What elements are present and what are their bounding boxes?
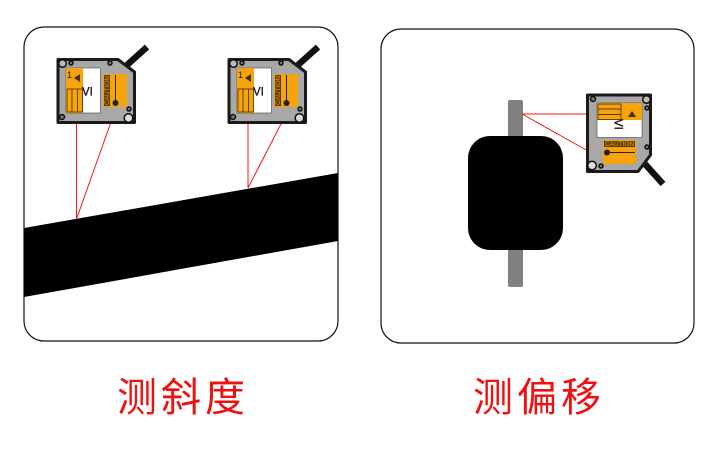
panel: tilt measurement [24,27,338,341]
panel frame right [381,29,694,343]
caption: tilt measurement: 测斜度 [117,376,249,420]
sensor 3: VI [612,119,624,130]
laser beams sensor 2 [248,122,282,188]
panel frame left [24,27,338,341]
sensor 3: CAUTION [605,141,634,148]
sensor 1: CAUTION [104,76,111,105]
sensor 1 [58,47,147,122]
sensor 2: VI [253,86,264,98]
inclined black band [24,173,338,297]
black block [468,136,563,250]
sensor 2 [229,47,318,122]
laser beams sensor 1 [76,122,111,219]
caption: offset measurement: 测偏移 [473,376,605,420]
sensor 3 [588,95,663,184]
laser beams sensor 3 [522,114,588,151]
gray rod [508,100,523,287]
sensor 2: CAUTION [275,76,282,105]
panel: offset measurement [381,29,694,343]
sensor 1: 1 [67,70,72,80]
sensor 1: VI [82,86,93,98]
sensor 2: 1 [238,70,243,80]
